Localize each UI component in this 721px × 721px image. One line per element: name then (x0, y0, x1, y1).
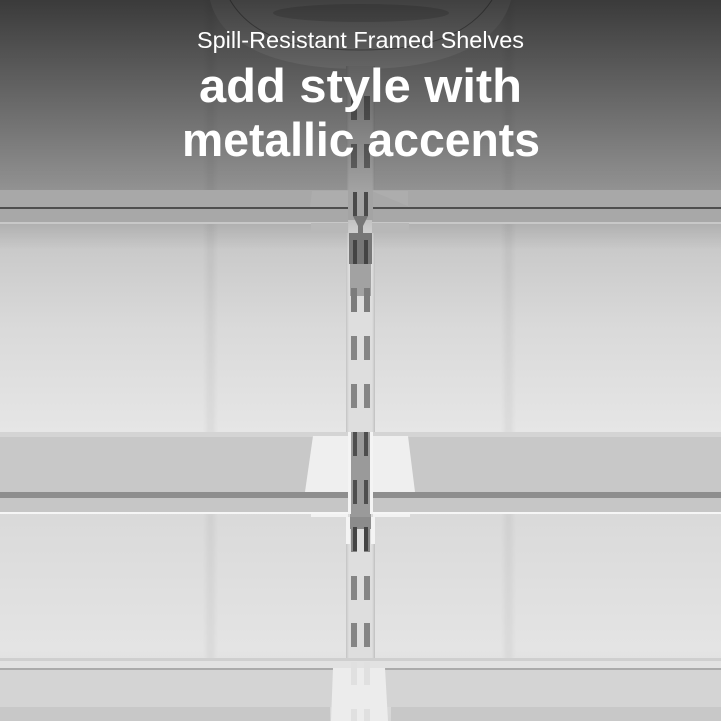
wall panel seams (207, 0, 512, 660)
dark overlay (0, 0, 721, 250)
upper shelf brackets (310, 190, 410, 312)
headline: add style with (199, 59, 522, 112)
lower shelf (0, 432, 721, 551)
headline (182, 59, 540, 166)
top light housing (210, 0, 511, 69)
headline: metallic accents (182, 113, 540, 166)
subtitle: Spill-Resistant Framed Shelves (197, 27, 524, 53)
centre rail with slots (346, 66, 375, 660)
lower shelf brackets (305, 432, 415, 551)
upper shelf (0, 190, 721, 312)
bottom shelf and drawers (0, 658, 721, 721)
